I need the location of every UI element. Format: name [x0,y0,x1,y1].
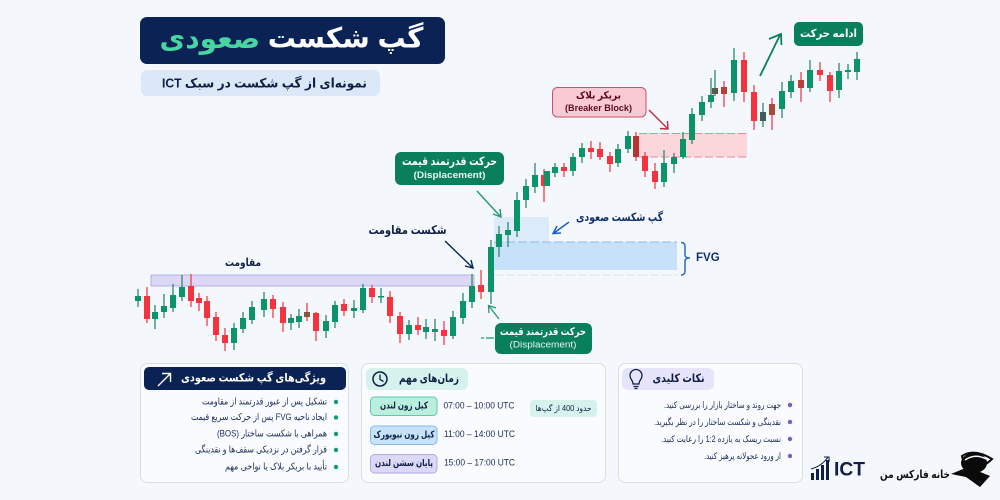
chip: share of gaps: حدود 400 از گپ‌ها [536,403,592,413]
logo: ICT [811,457,865,480]
list: features: همراهی با شکست ساختار (BOS) [217,428,327,440]
list: key points: نقدینگی و شکست ساختار را در نظر بگیرید. [654,416,781,427]
list: key points: جهت روند و ساختار بازار را بررسی کنید. [664,400,781,410]
row: London close: پایان سشن لندن [375,458,433,469]
callout: displacement top: (Displacement) [414,170,486,181]
list: key points: از ورود عجولانه پرهیز کنید. [704,451,781,461]
arrow: displacement bottom [481,306,499,338]
callout: breaker block [552,88,646,117]
panel heading: important times: زمان‌های مهم [399,373,459,385]
panel: features [140,364,348,482]
row: London kill zone: کیل زون لندن [380,400,428,412]
FVG bracket and label [681,242,720,275]
resistance zone [151,275,474,286]
icon: up arrow [158,374,170,386]
logo: ICT: ICT [834,460,865,480]
list: key points: نسبت ریسک به بازده 1:2 را رعایت کنید. [661,434,781,444]
list: features: ایجاد ناحیه FVG پس از حرکت سریع قیمت [191,412,327,423]
panel: important times [362,364,606,482]
breaker block zone [639,133,747,157]
callout: breaker block: (Breaker Block) [565,103,632,114]
panel heading: key points [622,368,714,390]
list: features: تأیید با بریکر بلاک یا نواحی مهم [225,460,327,472]
subtitle [141,70,380,96]
callout: displacement bottom [495,323,592,354]
callout: displacement top: حرکت قدرتمند قیمت [402,156,497,168]
arrow: breaker block [649,110,668,129]
list: features: تشکیل پس از عبور قدرتمند از مقاومت [202,396,327,408]
callout: breaker block: بریکر بلاک [576,90,621,102]
list: key points [654,400,792,461]
row: London close [370,454,515,473]
title: گپ شکست صعودی [160,22,424,54]
panel heading: features [144,367,346,390]
label: bullish breakaway gap: گپ شکست صعودی [576,210,663,225]
row: New York kill zone: 11:00 – 14:00 UTC [444,429,515,440]
FVG zone [494,242,677,275]
row: London close: 15:00 – 17:00 UTC [444,458,515,468]
chip: share of gaps [530,400,597,417]
icon: light bulb [630,370,642,388]
logo: My Forex Home [880,453,992,487]
candlestick chart [135,48,860,351]
gap zone [494,217,549,242]
list: features: قرار گرفتن در نزدیکی سقف‌ها و نقدینگی [195,444,327,456]
arrow: gap [553,222,569,234]
subtitle: نمونه‌ای از گپ شکست در سبک ICT [162,76,367,90]
list: features [191,396,338,472]
panel: key points [618,364,802,482]
row: New York kill zone [370,426,515,444]
logo: My Forex Home: خانه فارکس من [880,469,950,481]
callout: displacement bottom: حرکت قدرتمند قیمت [500,326,586,338]
callout: continuation: ادامه حرکت [800,28,857,40]
label: resistance break: شکست مقاومت [368,223,446,238]
arrow: displacement top [477,191,501,217]
panel heading: important times [366,368,468,390]
callout: displacement top [395,152,504,185]
row: London kill zone: 07:00 – 10:00 UTC [444,400,515,412]
icon: clock [373,372,387,386]
arrow: continuation [760,34,782,76]
panel heading: key points: نکات کلیدی [652,373,704,385]
label: resistance: مقاومت [225,257,261,269]
callout: continuation [794,22,863,46]
row: London kill zone [370,397,515,416]
FVG bracket and label: FVG [696,252,720,264]
row: New York kill zone: کیل زون نیویورک [374,430,435,440]
panel heading: features: ویژگی‌های گپ شکست صعودی [181,370,326,386]
callout: displacement bottom: (Displacement) [510,340,576,350]
title [140,17,445,64]
arrow: resistance break [445,241,473,268]
